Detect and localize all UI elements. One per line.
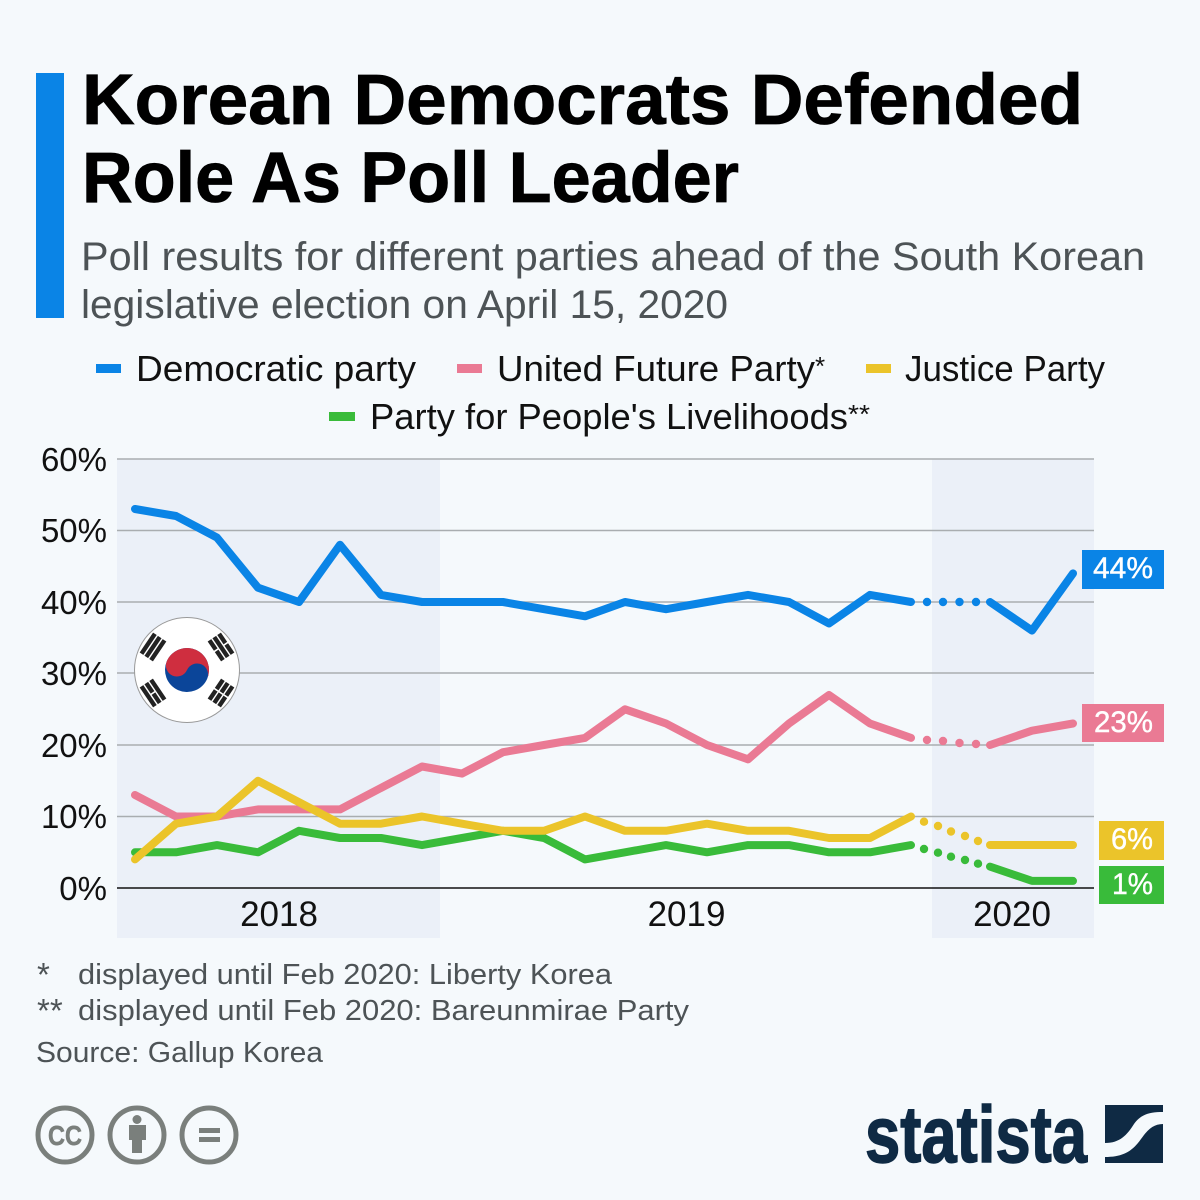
legend item: Justice Party: Justice Party	[905, 348, 1105, 389]
footnotes	[37, 956, 690, 1029]
end label: 44%: 44%	[1093, 552, 1153, 585]
legend item: Party for People's Livelihoods: **	[848, 399, 870, 429]
icon: creative commons: CC	[48, 1120, 82, 1151]
subtitle: legislative election on April 15, 2020	[81, 283, 728, 327]
series: United Future Party	[135, 695, 1073, 816]
footnotes: displayed until Feb 2020: Liberty Korea	[78, 959, 613, 991]
subtitle: Poll results for different parties ahead of the South Korean	[81, 235, 1145, 279]
end label: 6%	[1099, 821, 1164, 860]
y axis labels: 20%	[41, 727, 107, 764]
y axis labels: 0%	[59, 870, 107, 907]
end label: 1%: 1%	[1112, 868, 1153, 901]
y axis labels: 40%	[41, 584, 107, 621]
statista logo: statista	[865, 1090, 1087, 1179]
legend	[96, 348, 1105, 437]
end label: 6%: 6%	[1111, 823, 1153, 856]
x axis labels: 2019	[648, 895, 725, 934]
header accent bar	[36, 73, 64, 318]
y axis labels: 60%	[41, 441, 107, 478]
legend item: Party for People's Livelihoods: Party for People's Livelihoods	[370, 396, 848, 437]
footnotes: **	[37, 992, 63, 1029]
x axis labels	[240, 895, 1051, 934]
year band: 2018	[117, 459, 440, 938]
year band: 2020	[932, 459, 1094, 938]
end label: 1%	[1099, 866, 1164, 904]
legend item: United Future Party: *	[815, 351, 825, 381]
end label: 23%	[1082, 704, 1164, 742]
series: Democratic party	[135, 509, 1073, 631]
footnotes: *	[37, 956, 50, 993]
y axis labels: 10%	[41, 798, 107, 835]
series: Justice Party	[135, 781, 1073, 859]
title	[82, 61, 1083, 218]
icon: attribution	[110, 1108, 164, 1162]
footnotes: displayed until Feb 2020: Bareunmirae Party	[78, 995, 690, 1027]
line chart	[41, 441, 1164, 938]
title: Korean Democrats Defended	[82, 61, 1083, 140]
end label: 23%: 23%	[1094, 706, 1153, 739]
x axis labels: 2020	[973, 895, 1051, 934]
series: Party for People's Livelihoods	[135, 831, 1073, 881]
icon: no derivatives	[182, 1108, 236, 1162]
x axis labels: 2018	[240, 895, 318, 934]
icon: South Korean flag	[134, 618, 240, 722]
end label: 44%	[1082, 550, 1164, 589]
y axis labels: 30%	[41, 655, 107, 692]
title: Role As Poll Leader	[82, 139, 739, 218]
legend item: Democratic party: Democratic party	[136, 348, 416, 389]
source: Source: Gallup Korea	[36, 1037, 324, 1069]
legend item: United Future Party: United Future Party	[497, 348, 815, 389]
y axis labels	[41, 441, 107, 907]
y axis labels: 50%	[41, 512, 107, 549]
subtitle	[81, 235, 1145, 327]
icon: creative commons	[38, 1108, 92, 1162]
